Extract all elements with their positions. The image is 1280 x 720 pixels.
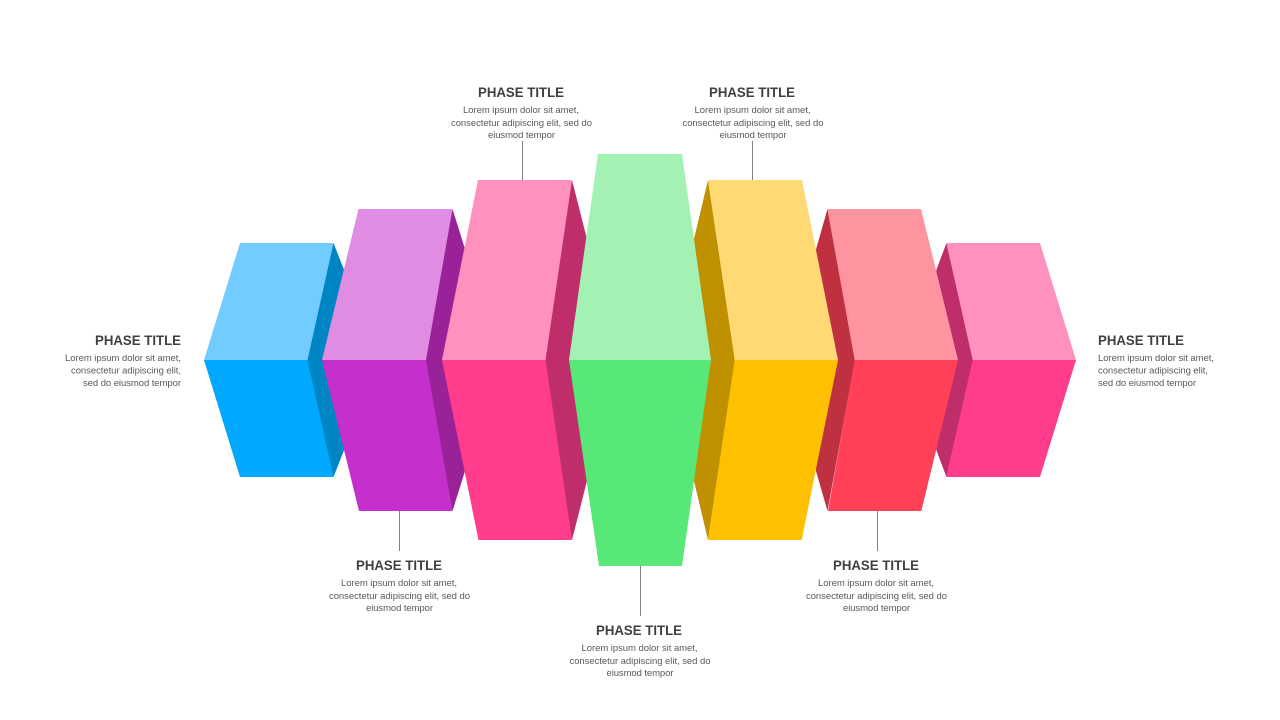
block 3: pink bbox=[442, 180, 591, 540]
text block: top right phase: PHASE TITLE bbox=[709, 84, 795, 100]
text block: right phase: Lorem ipsum dolor sit amet, bbox=[1098, 353, 1214, 364]
text block: top left phase: PHASE TITLE bbox=[478, 84, 564, 100]
text block: right phase: sed do eiusmod tempor bbox=[1098, 378, 1196, 389]
text block: bottom left phase: consectetur adipiscing elit, sed do bbox=[329, 591, 470, 602]
text block: bottom left phase bbox=[329, 557, 470, 614]
text block: right phase: PHASE TITLE bbox=[1098, 332, 1184, 348]
block 2: purple bbox=[322, 209, 470, 511]
block 7: magenta bbox=[930, 243, 1076, 477]
text block: bottom right phase: Lorem ipsum dolor sit amet, bbox=[818, 578, 934, 589]
text block: bottom left phase: Lorem ipsum dolor sit amet, bbox=[341, 578, 457, 589]
connector: bottom left bbox=[398, 511, 400, 551]
text block: left phase bbox=[65, 332, 181, 389]
text block: bottom right phase: PHASE TITLE bbox=[833, 557, 919, 573]
text block: bottom right phase: eiusmod tempor bbox=[843, 603, 910, 614]
text block: bottom centre phase: PHASE TITLE bbox=[596, 622, 682, 638]
text block: left phase: PHASE TITLE bbox=[95, 332, 181, 348]
text block: bottom centre phase: eiusmod tempor bbox=[606, 668, 674, 679]
text block: right phase: consectetur adipiscing elit, bbox=[1098, 366, 1208, 376]
text block: bottom centre phase: Lorem ipsum dolor sit amet, bbox=[582, 643, 698, 654]
connector: bottom right bbox=[876, 511, 878, 551]
block 6: red bbox=[810, 209, 958, 511]
connector: bottom centre bbox=[640, 566, 642, 616]
text block: bottom left phase: eiusmod tempor bbox=[366, 603, 433, 614]
block 4: green centre bbox=[569, 154, 711, 566]
connector: top left bbox=[522, 141, 524, 180]
text block: bottom left phase: PHASE TITLE bbox=[356, 557, 442, 573]
text block: top left phase: consectetur adipiscing elit, sed do bbox=[451, 118, 592, 129]
block 5: yellow bbox=[694, 180, 838, 540]
text block: right phase bbox=[1098, 332, 1214, 389]
text block: bottom centre phase: consectetur adipiscing elit, sed do bbox=[570, 656, 710, 667]
text block: bottom right phase: consectetur adipiscing elit, sed do bbox=[806, 591, 947, 602]
text block: top right phase bbox=[682, 84, 824, 141]
text block: left phase: Lorem ipsum dolor sit amet, bbox=[65, 353, 181, 364]
text block: top left phase: eiusmod tempor bbox=[488, 130, 555, 141]
text block: top right phase: Lorem ipsum dolor sit amet, bbox=[694, 105, 810, 116]
text block: left phase: sed do eiusmod tempor bbox=[83, 378, 181, 389]
text block: top left phase bbox=[451, 84, 592, 141]
text block: top right phase: consectetur adipiscing elit, sed do bbox=[682, 118, 824, 129]
block 1: blue bbox=[204, 243, 350, 477]
connector: top right bbox=[752, 141, 754, 180]
text block: left phase: consectetur adipiscing elit, bbox=[71, 366, 181, 376]
text block: top left phase: Lorem ipsum dolor sit amet, bbox=[463, 105, 579, 116]
text block: bottom right phase bbox=[806, 557, 947, 614]
text block: bottom centre phase bbox=[570, 622, 710, 679]
text block: top right phase: eiusmod tempor bbox=[720, 130, 786, 141]
